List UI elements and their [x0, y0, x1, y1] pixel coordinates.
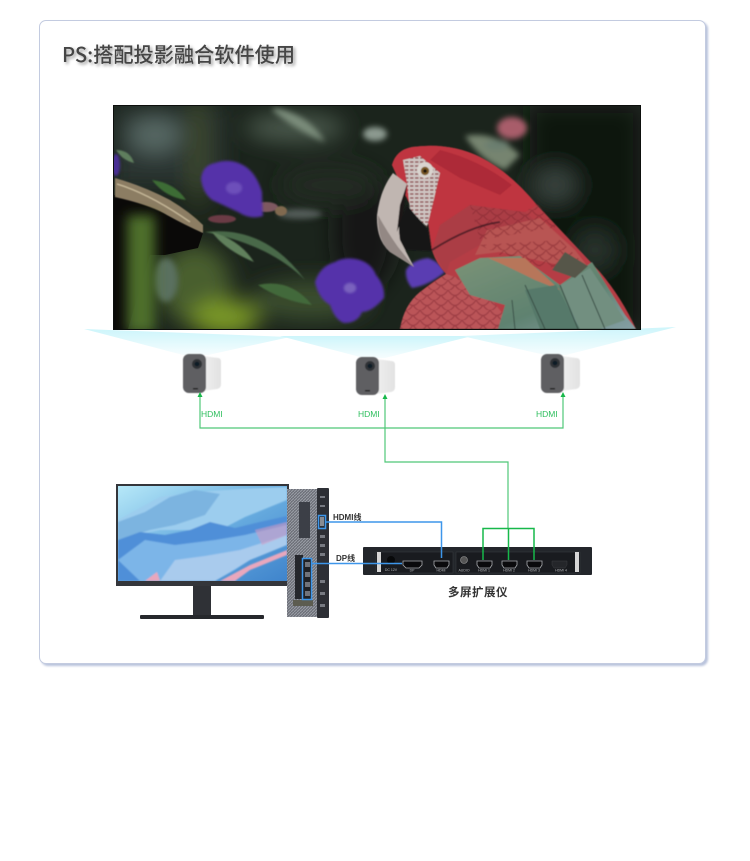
projection screen photo: macaw — [112, 90, 641, 336]
computer monitor — [116, 484, 289, 586]
extender label: 多屏扩展仪 — [448, 585, 508, 599]
monitor stand — [140, 586, 264, 619]
projector left — [183, 354, 221, 393]
eye — [417, 162, 433, 178]
HDMI labels: HDMI — [536, 409, 558, 419]
cable labels — [333, 512, 361, 563]
HDMI labels: HDMI — [358, 409, 380, 419]
light beams — [84, 327, 676, 358]
desktop computer — [287, 488, 329, 618]
HDMI labels: HDMI — [201, 409, 223, 419]
diagram — [84, 105, 676, 619]
blurred foliage background — [114, 90, 640, 336]
flowers — [112, 154, 445, 323]
macaw — [377, 146, 636, 329]
projector centre — [356, 357, 395, 395]
cable labels: HDMI线 — [333, 512, 361, 522]
multi-screen extender device: HDMI 1 — [478, 568, 490, 572]
blue HDMI and DP cables — [302, 516, 442, 600]
cable labels: DP线 — [336, 553, 355, 563]
multi-screen extender device — [363, 547, 592, 575]
projector right — [541, 354, 580, 393]
panel: projection blending card — [39, 20, 706, 664]
multi-screen extender device: AUDIO — [458, 568, 470, 572]
multi-screen extender device: DP — [410, 568, 415, 572]
multi-screen extender device: DC 12V — [385, 568, 398, 572]
green wing — [455, 256, 636, 329]
multi-screen extender device: HDMI 4 — [555, 568, 567, 572]
green HDMI output wiring — [198, 392, 566, 560]
lower beak — [396, 205, 432, 251]
red plumage — [392, 146, 636, 329]
HDMI labels — [201, 409, 558, 419]
title: PS:搭配投影融合软件使用 — [62, 39, 295, 68]
branch — [114, 178, 203, 333]
multi-screen extender device: HDMI 3 — [528, 568, 540, 572]
multi-screen extender device: HDMI — [437, 568, 445, 572]
upper beak — [377, 173, 414, 267]
multi-screen extender device: HDMI 2 — [503, 568, 515, 572]
white face patch — [403, 156, 440, 227]
